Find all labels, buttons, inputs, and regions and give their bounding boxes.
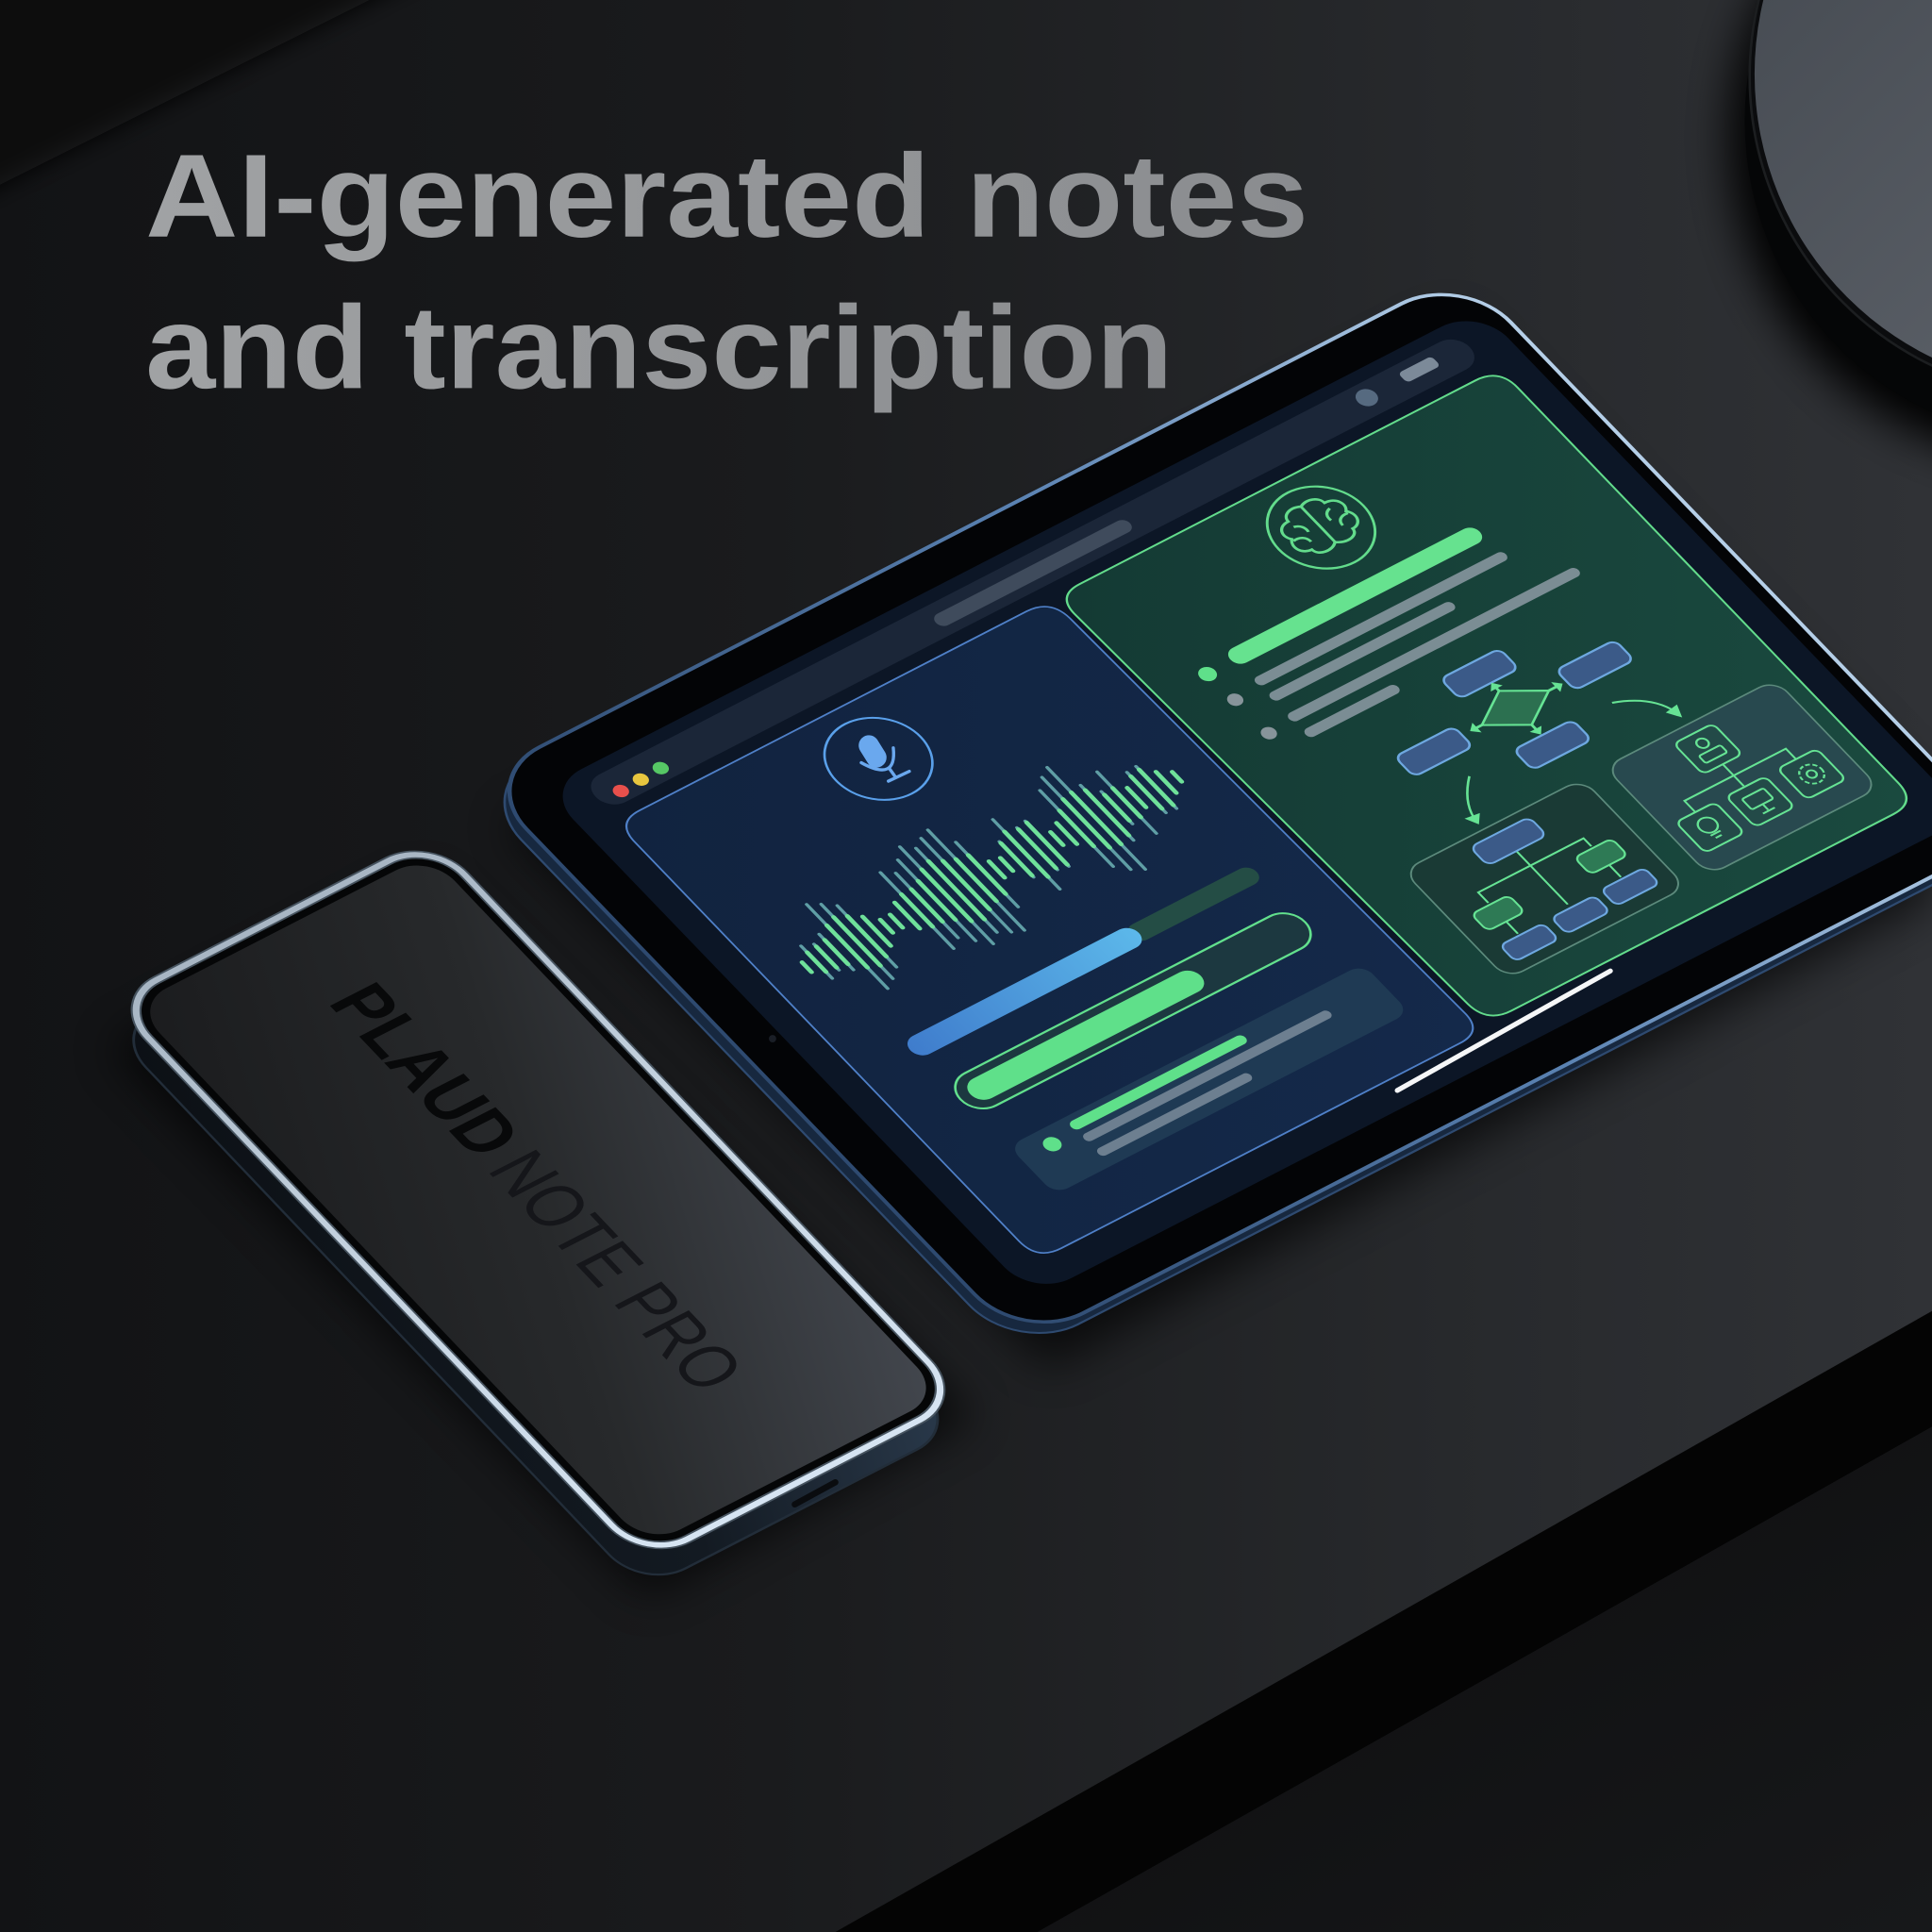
device wordmark: NOTE PRO (472, 1140, 760, 1403)
icon: monitor (1725, 776, 1795, 827)
arrow to org chart (1612, 681, 1687, 737)
panel: flow chart (1403, 778, 1687, 979)
tablet (474, 273, 1932, 1368)
summary heading bar (1224, 525, 1487, 667)
title: AI-generated notes (145, 129, 1308, 262)
icon: person card (1674, 724, 1742, 774)
summary text lines (1251, 530, 1598, 740)
header controls (1351, 355, 1443, 409)
icon: microphone (855, 731, 909, 781)
home indicator (1397, 971, 1610, 1091)
tablet body and bezel (478, 273, 1932, 1344)
device wordmark (312, 972, 760, 1403)
flowchart: decision diamond (1359, 606, 1672, 813)
icon: brain (1245, 471, 1397, 584)
window control dots (608, 759, 674, 800)
progress bar (902, 863, 1266, 1059)
arrow to flow chart (1439, 776, 1504, 827)
icon: light bulb (1675, 802, 1744, 853)
recorder device: PLAUD NOTE PRO (111, 839, 974, 1595)
tablet screen (543, 308, 1932, 1297)
search bar (930, 518, 1136, 628)
panel: org chart icons (1605, 679, 1879, 875)
icon: gear (1777, 749, 1846, 800)
panel: AI notes (green) (1057, 368, 1917, 1029)
decorative disk object, top right (1730, 0, 1932, 463)
transcript card (1008, 964, 1409, 1194)
audio waveform (758, 725, 1226, 1018)
device glass face (133, 854, 943, 1546)
device wordmark: PLAUD (312, 972, 538, 1169)
bullet dots (1194, 663, 1280, 743)
green progress pill (945, 906, 1321, 1116)
panel: audio recording (blue) (616, 593, 1483, 1260)
title (145, 129, 1308, 413)
USB-C port (794, 1482, 836, 1505)
title: and transcription (145, 280, 1173, 413)
device rim (114, 839, 962, 1560)
browser header bar (582, 333, 1483, 810)
front camera (769, 1035, 776, 1042)
